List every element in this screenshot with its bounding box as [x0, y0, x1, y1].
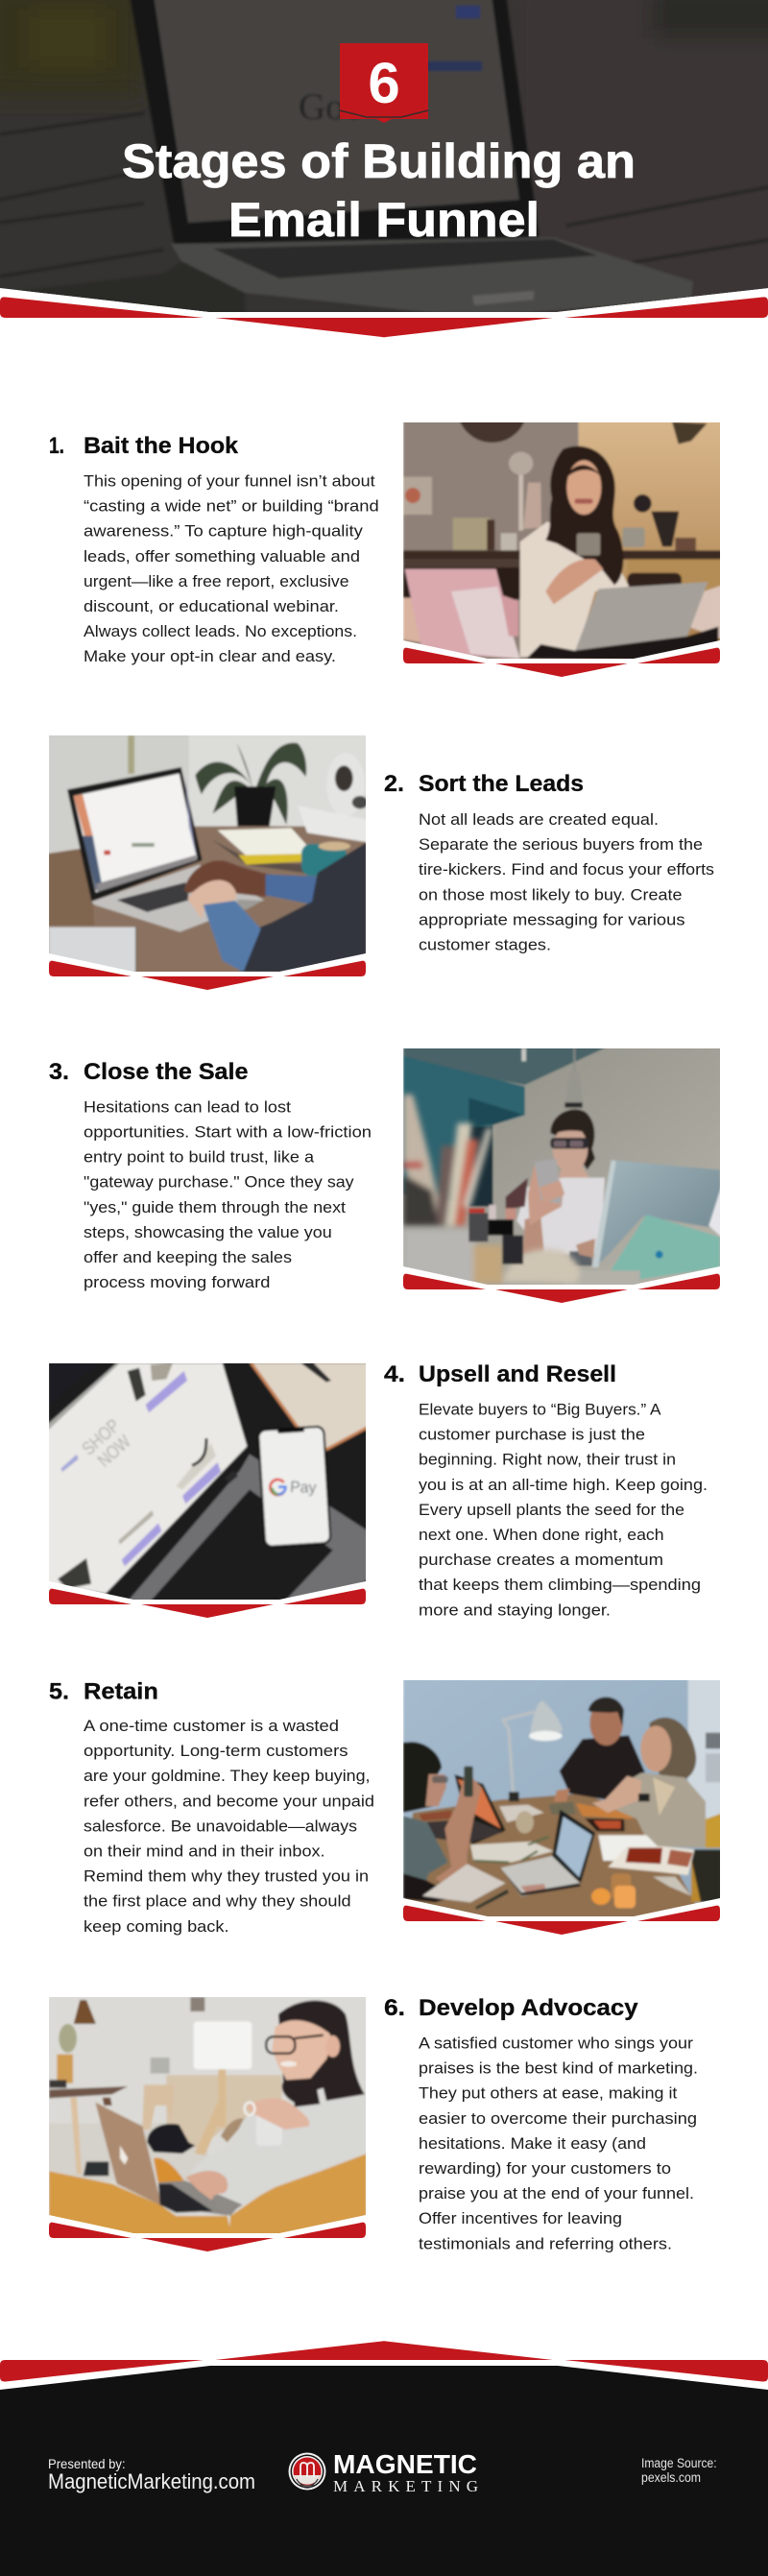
text: stage 2 body: on those most likely to buy. Create — [419, 886, 682, 903]
text: stage 1 body: urgent—like a free report, exclusive — [84, 573, 349, 590]
text: stage 6 body — [419, 2035, 698, 2252]
text: stage 4 body: Elevate buyers to “Big Buyers.” A — [419, 1402, 661, 1419]
footer chevron band — [0, 2341, 768, 2382]
image: phone showing G Pay on a laptop: NOW — [94, 1432, 135, 1472]
text: stage 4 body: that keeps them climbing—spending — [419, 1577, 701, 1594]
text: stage 3 body: "yes," guide them through the next — [84, 1199, 346, 1216]
text: stage 1 body — [84, 472, 379, 665]
panel: stage 4 Upsell and Resell — [48, 1361, 708, 1619]
text: stage 4 body: purchase creates a momentum — [419, 1552, 663, 1569]
text: stage 6 body: A satisfied customer who sings your — [419, 2035, 694, 2053]
chevron band — [403, 648, 720, 677]
text: stage 5 body: on their mind and in their inbox. — [84, 1843, 324, 1861]
panel: stage 6 Develop Advocacy — [48, 1995, 698, 2252]
heading: stage 1: Bait the Hook — [84, 433, 238, 459]
text: stage 4 body: Every upsell plants the seed for the — [419, 1502, 684, 1519]
logo: Magnetic Marketing — [288, 2449, 478, 2495]
panel: stage 5 Retain — [49, 1678, 723, 1936]
text: stage 3 body — [84, 1098, 372, 1291]
text: stage 6 body: They put others at ease, making it — [419, 2085, 678, 2103]
chevron band — [403, 1906, 720, 1935]
chevron band — [49, 1589, 366, 1618]
text: stage 4 body: next one. When done right, each — [419, 1527, 664, 1544]
image: hands typing on a laptop — [48, 734, 368, 990]
text: stage 4 body: more and staying longer. — [419, 1601, 611, 1619]
text: stage 6 body: Offer incentives for leaving — [419, 2210, 622, 2227]
image: team working around a table — [403, 1678, 723, 1935]
text: stage 2 body: Not all leads are created equal. — [419, 811, 659, 829]
badge: number 6: 6 — [368, 51, 400, 115]
text: stage 3 body: steps, showcasing the value you — [84, 1224, 332, 1241]
text: stage 6 body: rewarding) for your customers to — [419, 2160, 671, 2178]
heading: stage 4: Upsell and Resell — [419, 1361, 616, 1387]
hero photo: laptop on a wooden table — [0, 0, 768, 317]
text: stage 2 body: Separate the serious buyers from the — [419, 836, 703, 854]
presented by — [48, 2456, 255, 2493]
text: stage 6 body: praises is the best kind of marketing. — [419, 2060, 698, 2078]
image source credit: pexels.com — [641, 2470, 701, 2485]
text: stage 5 body — [84, 1718, 374, 1936]
text: stage 5 body: Remind them why they trusted you in — [84, 1868, 369, 1886]
heading: stage 6: 6. — [384, 1995, 405, 2021]
heading: stage 2: Sort the Leads — [419, 771, 584, 797]
presented by: MagneticMarketing.com — [48, 2469, 255, 2493]
text: stage 5 body: the first place and why they should — [84, 1893, 351, 1911]
text: stage 2 body: tire-kickers. Find and focus your efforts — [419, 861, 714, 879]
image: phone showing G Pay on a laptop: SHOP — [79, 1416, 124, 1459]
text: stage 4 body: customer purchase is just the — [419, 1427, 645, 1444]
panel: stage 2 Sort the Leads — [48, 734, 714, 990]
text: stage 1 body: leads, offer something valuable and — [84, 548, 360, 566]
title: Email Funnel — [228, 193, 540, 247]
heading: stage 3: Close the Sale — [84, 1059, 248, 1085]
image: smiling woman with laptop and mug — [48, 1995, 368, 2251]
hero header — [0, 0, 768, 337]
text: stage 5 body: A one-time customer is a wasted — [84, 1718, 339, 1735]
image: phone showing G Pay on a laptop — [48, 1361, 368, 1618]
heading: stage 5: 5. — [49, 1678, 69, 1704]
text: stage 1 body: “casting a wide net” or building “brand — [84, 498, 379, 516]
text: stage 3 body: entry point to build trust, like a — [84, 1149, 315, 1167]
text: stage 5 body: are your goldmine. They keep buying, — [84, 1768, 371, 1785]
heading: stage 4: 4. — [384, 1361, 405, 1387]
heading: stage 5 — [49, 1678, 158, 1704]
heading: stage 6: Develop Advocacy — [419, 1995, 638, 2021]
badge: number 6 — [340, 43, 428, 123]
image: phone showing G Pay on a laptop: Pay — [290, 1478, 317, 1497]
image: woman with phone on sofa — [403, 422, 720, 677]
text: stage 5 body: opportunity. Long-term customers — [84, 1743, 348, 1760]
text: stage 5 body: salesforce. Be unavoidable—always — [84, 1818, 357, 1835]
title: Stages of Building an — [122, 134, 636, 188]
image source credit: Image Source: — [641, 2456, 717, 2470]
text: stage 3 body: process moving forward — [84, 1274, 270, 1291]
text: stage 2 body: appropriate messaging for various — [419, 911, 685, 928]
text: stage 1 body: Make your opt-in clear and easy. — [84, 648, 336, 665]
image source credit — [641, 2456, 717, 2485]
presented by: Presented by: — [48, 2456, 126, 2471]
heading: stage 1: 1. — [49, 433, 64, 459]
text: stage 1 body: Always collect leads. No exceptions. — [84, 623, 357, 640]
text: stage 4 body: you is at an all-time high. Keep going. — [419, 1477, 708, 1494]
hero chevron band — [0, 297, 768, 337]
text: stage 4 body: beginning. Right now, their trust in — [419, 1452, 676, 1469]
hero photo: laptop on a wooden table: Goo — [299, 86, 363, 128]
logo: Magnetic Marketing: MAGNETIC — [333, 2449, 477, 2479]
text: stage 1 body: awareness.” To capture high-quality — [84, 523, 364, 541]
text: stage 6 body: testimonials and referring others. — [419, 2235, 672, 2252]
chevron band — [403, 1274, 720, 1303]
text: stage 3 body: "gateway purchase." Once they say — [84, 1174, 354, 1192]
text: stage 1 body: This opening of your funnel isn’t about — [84, 472, 375, 490]
text: stage 6 body: praise you at the end of your funnel. — [419, 2185, 694, 2203]
title — [122, 134, 636, 247]
text: stage 5 body: keep coming back. — [84, 1918, 228, 1936]
text: stage 3 body: opportunities. Start with a low-friction — [84, 1123, 372, 1141]
heading: stage 3: 3. — [49, 1059, 69, 1085]
text: stage 6 body: hesitations. Make it easy (and — [419, 2135, 646, 2153]
text: stage 3 body: Hesitations can lead to lost — [84, 1098, 291, 1116]
footer background — [0, 2366, 768, 2576]
text: stage 1 body: discount, or educational webinar. — [84, 598, 339, 615]
text: stage 3 body: offer and keeping the sales — [84, 1249, 292, 1266]
logo: Magnetic Marketing: MARKETING — [333, 2477, 478, 2495]
text: stage 6 body: easier to overcome their purchasing — [419, 2110, 697, 2128]
text: stage 2 body — [419, 811, 714, 954]
panel: stage 3 Close the Sale — [49, 1047, 723, 1303]
text: stage 5 body: refer others, and become your unpaid — [84, 1793, 374, 1810]
panel: stage 1 Bait the Hook — [50, 422, 720, 677]
image: woman in glasses with phone and laptop — [403, 1047, 723, 1303]
text: stage 2 body: customer stages. — [419, 937, 551, 954]
heading: stage 2: 2. — [384, 771, 404, 797]
footer — [0, 2341, 768, 2576]
chevron band — [49, 961, 366, 990]
heading: stage 5: Retain — [84, 1678, 158, 1704]
chevron band — [49, 2223, 366, 2251]
text: stage 4 body — [419, 1402, 708, 1619]
